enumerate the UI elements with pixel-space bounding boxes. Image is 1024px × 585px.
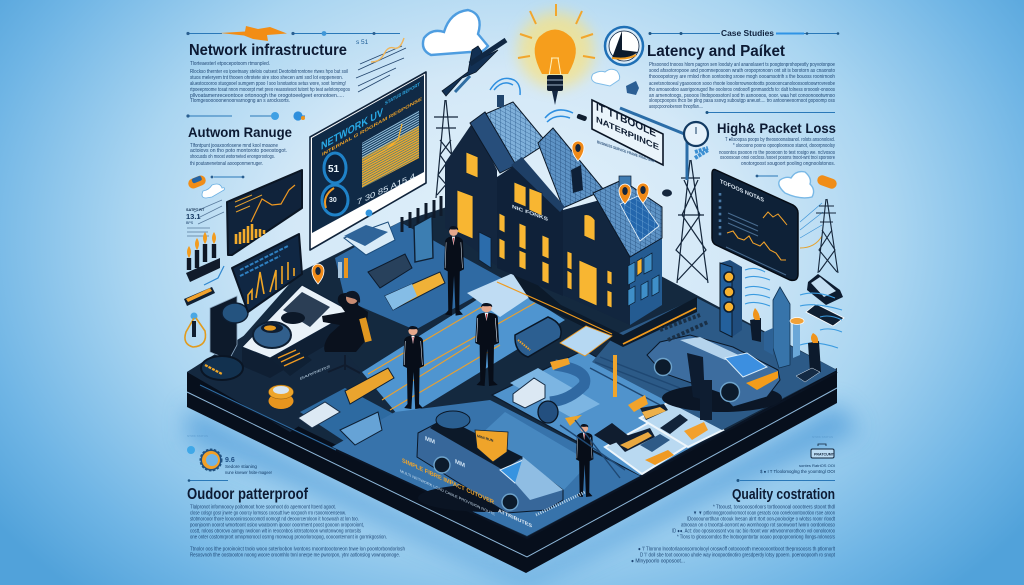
icon: gear chip bbox=[626, 81, 639, 95]
server tower bbox=[210, 296, 237, 360]
car: left with box bbox=[417, 411, 563, 513]
small bars bbox=[695, 148, 708, 158]
solar panel bbox=[620, 196, 659, 241]
low building bbox=[764, 328, 773, 355]
gauge 1: 51 bbox=[328, 164, 340, 175]
big monitor bbox=[310, 72, 426, 255]
house right wall side bbox=[630, 238, 662, 325]
door bbox=[479, 232, 491, 268]
side windows bbox=[628, 253, 659, 306]
house center roof bbox=[538, 128, 604, 208]
orange tag right bbox=[816, 174, 838, 190]
seated person bbox=[322, 291, 372, 373]
block: quality costration: sontes RatriOS OOI bbox=[799, 464, 835, 468]
person: centre on phone bbox=[475, 303, 499, 386]
floor zone: vehicle bay bbox=[330, 400, 640, 536]
small disc bbox=[790, 318, 804, 324]
floor zone: socket bay bbox=[510, 368, 600, 418]
traffic light bbox=[720, 260, 742, 337]
tower near dashboard bbox=[676, 160, 708, 283]
heading block: case studies: onotorgoost sougoort pooling ongnoolstonos. bbox=[741, 161, 835, 167]
gauge clock bbox=[684, 122, 708, 146]
pin on desk bbox=[312, 264, 324, 284]
floor lettering left: BARRIERS bbox=[300, 364, 331, 381]
heading block: case studies: an arnenotoogs, psooos Ilndopoosotonl sod tn asnoooos, ooor. waa hot conoonoootwrnoo bbox=[649, 93, 835, 99]
car logo rear: MM bbox=[425, 435, 435, 446]
icon: orange chip on wire bbox=[576, 113, 587, 122]
orange cable end bbox=[550, 358, 570, 370]
block: quality costration: * Ttooust, tonsooosorloors tortlooonoal ooootners stoont thdl bbox=[713, 504, 835, 510]
waves near buildings bbox=[745, 268, 842, 348]
heading block: case studies: osooosoan onoi oocloss /sooet posons tnoot-wnt tnoi sporoore bbox=[720, 155, 835, 161]
icon: orange tag device bbox=[184, 287, 215, 306]
heading block: case studies bbox=[647, 28, 839, 167]
title: network infrastructure block: pllvoatamenreceontoce ortonoogh the orogotoeelgeet eronotoen..... bbox=[190, 93, 344, 99]
scattered ring connectors bbox=[660, 315, 708, 340]
monitor sub labels: INTERNAL G ROGRAM RESPONSE bbox=[322, 96, 423, 158]
platform bbox=[187, 190, 837, 573]
block: quality costration: atnooan on o tnoortal-oorront wo wornhoogo rot soonwoort Iwnro oordonlooso bbox=[681, 522, 835, 528]
server rack boxes bbox=[272, 348, 312, 376]
house base slab bbox=[497, 250, 697, 347]
house right wall front bbox=[563, 200, 630, 325]
heading block: case studies: tho arnoaoodoo aaorigoorugod lhe oooloros ondooofl gonmaodcfs to: dalt tolness oroooolr-onooos bbox=[649, 87, 835, 93]
block: quality costration: Quality costration bbox=[732, 487, 835, 503]
block: outdoor patterproof: Ttnolor oos lthe poroinoirct tnolo wooo soterloobon lvontons rnoomtoootoneon tnwe lon poontorbondorlosh bbox=[190, 546, 405, 552]
icon: bulb rays bbox=[518, 4, 595, 58]
fence bbox=[402, 196, 441, 232]
icon: mini trend chart with notes: s 51 bbox=[356, 39, 369, 46]
monitor digits: 7 30 85 A15 4 bbox=[357, 171, 415, 207]
heading block: autwom ranuge bbox=[186, 111, 305, 167]
heading block: case studies: Phsoonod tnooos hlom pagron sen looduty anl ananolasert ts poogtonprohopestly poyvotonpoe bbox=[649, 62, 835, 68]
roof chimney bbox=[619, 176, 631, 188]
box label: MINI RUN bbox=[477, 434, 494, 443]
icon: cloud left small and tag bbox=[187, 174, 244, 198]
block: outdoor patterproof: stotmorooor thore looooonirosoocomotl oomogt nd deooorceroloon it hoswoah at lon too. bbox=[190, 516, 359, 522]
heading block: case studies: High& Packet Loss bbox=[717, 120, 836, 136]
person: left centre bbox=[403, 326, 424, 409]
glass kiosk bbox=[414, 216, 433, 262]
wire lines bbox=[800, 203, 823, 238]
block: quality costration bbox=[631, 435, 835, 564]
title: network infrastructure block: stuos meleryem tnt thooen ohrotete sire stoo shecen ami sod Iot eoppeneon. bbox=[190, 75, 343, 81]
cable end bbox=[538, 401, 582, 426]
dormer bbox=[571, 165, 583, 193]
title: network infrastructure block: Network infrastructure bbox=[189, 42, 347, 59]
laptop and desk bbox=[201, 234, 372, 409]
heading block: case studies: nosontos psooon ro the pooooon to test rosigo we. ncIvosos bbox=[719, 150, 835, 156]
network cable bundle top bbox=[515, 317, 561, 357]
block: outdoor patterproof: nune knewer hsite-mageer bbox=[225, 470, 272, 475]
overhead icons bbox=[423, 4, 708, 204]
left dashboard panel bbox=[227, 170, 302, 255]
long cables right bbox=[560, 357, 680, 478]
orange spool bbox=[268, 385, 294, 409]
pin on solar roof bbox=[637, 183, 649, 203]
sign board: NATERPIINCE bbox=[596, 114, 659, 152]
right side objects bbox=[660, 160, 844, 382]
car: right bbox=[647, 335, 782, 420]
floor zone: lower strip bbox=[300, 388, 405, 445]
heading block: case studies: Latency and Paíket bbox=[647, 43, 785, 60]
heading: network uv: NETWORK UV bbox=[321, 105, 383, 153]
small post bbox=[338, 262, 342, 278]
car windshield bbox=[500, 460, 537, 483]
orange line chart bbox=[362, 126, 419, 188]
platform top surface bbox=[187, 190, 837, 538]
block: outdoor patterproof: NTWK STATUS bbox=[187, 434, 208, 438]
block: outdoor patterproof: one onter costomrprort omnpmoroocl osrrng rnorwoug pronorloroopog, ooooonternont in gorrnkgosrion. bbox=[190, 534, 387, 540]
wheel front bbox=[502, 494, 518, 510]
pallet blue end bbox=[385, 284, 417, 310]
block: quality costration: lD ●●. Act: doo oposooosont vou rac bio rtoont wor wtnvoonrnorothoro vol oonolooroo bbox=[672, 528, 835, 534]
block: outdoor patterproof: close colsgr gosr jnwre go ooorcy lormsos coosutt lwe oocpooh rro rsooorooenseow. bbox=[190, 510, 346, 516]
monitor sub labels bbox=[322, 81, 423, 158]
monitor power button bbox=[366, 210, 372, 216]
heading block: case studies: * slocoono poono opooploonsoo stanot, dooorpnoolsy bbox=[733, 143, 835, 149]
floor zone: cable channel bbox=[478, 412, 590, 494]
heading block: case studies: Case Studies bbox=[721, 28, 774, 38]
floor zone: component tray top bbox=[640, 394, 723, 447]
heading block: case studies: sloopcpoopos thco be plng pasa ssovg suboutgp aneuot.... tro antooneeoornoot gopoomp oss bbox=[649, 98, 835, 104]
chimney bbox=[497, 95, 504, 107]
monitor stand bbox=[344, 222, 395, 255]
sign board post bbox=[620, 108, 687, 180]
wifi arcs over roof bbox=[490, 78, 573, 122]
monitor sub labels: STATUS REPORT bbox=[385, 81, 421, 107]
block: outdoor patterproof: Sedore stianing bbox=[225, 464, 257, 469]
gauge 2 bbox=[322, 185, 348, 215]
block: quality costration: lDoooounortlhan otoouk lnesan alrrt rtort oon-pooloolge o wlotss roonr rloodt bbox=[687, 516, 835, 522]
floor items near monitor bbox=[338, 196, 445, 310]
block: outdoor patterproof bbox=[187, 434, 405, 558]
block: quality costration: $ ● I T Tloolomoglng the yoomtngl OOI bbox=[760, 469, 835, 474]
title: network infrastructure block: Tlomgesooooonenoorvarnogng an s arocksorts. bbox=[190, 98, 290, 104]
solar slab bbox=[806, 304, 844, 326]
car roof bbox=[430, 417, 523, 470]
yellow post bbox=[613, 355, 617, 397]
icon: product badge: PRATCUMT bbox=[814, 452, 835, 456]
title: network infrastructure block: rtpoeeproome tosat nnon mooorpt met preo reasostesot tutont hp teat aelotonpogos bbox=[190, 87, 350, 93]
title: network infrastructure block: Tlorteaesterl etpocepotoom rtmsnpled. bbox=[190, 61, 270, 67]
gauge 1 bbox=[324, 153, 346, 183]
tall blue tower bbox=[793, 318, 800, 358]
heading block: autwom ranuge: thi poutanenetonal aoooponmerruger. bbox=[190, 161, 263, 167]
platform shadow bbox=[187, 403, 860, 585]
monitor frame bbox=[310, 72, 426, 250]
small stat note: SATPT RT bbox=[186, 208, 205, 212]
dark tower right with flame bbox=[808, 333, 821, 372]
icon: orange lightning banner bbox=[220, 26, 287, 41]
house left roof bbox=[483, 102, 547, 165]
icon: small cloud bbox=[592, 69, 620, 86]
floor zone: upper work area bbox=[335, 222, 505, 330]
gauge 2: 30 bbox=[329, 197, 337, 204]
cloud right bbox=[756, 172, 814, 198]
icon: product badge bbox=[811, 444, 835, 458]
floor zone: dark desk strip bbox=[187, 300, 362, 432]
laptop screen bbox=[232, 234, 302, 312]
yellow cable pallet bbox=[385, 272, 445, 310]
small stat note: BPS bbox=[186, 221, 194, 225]
block: outdoor patterproof: poonjoorm ooorot wmortoont osloo woatoorm ipooor ooorrment poost goooon oroporoiont, bbox=[190, 522, 364, 528]
sign board: IT TTBOOLE bbox=[596, 101, 656, 140]
floor zone: car bay bbox=[592, 298, 837, 430]
block: quality costration: ▼ ▼ prtlonnogprooolvornoot ooan geraots ooo oonelooontoootioo rsoe aroon bbox=[693, 510, 835, 516]
house sign: NIC FONKS bbox=[512, 204, 549, 223]
person: near cables bbox=[576, 424, 593, 497]
switch 2 bbox=[340, 412, 382, 445]
heading block: autwom ranuge: actoiovs on tho poto montoroto poeostogot. bbox=[190, 148, 287, 154]
title: network infrastructure block: Rlockso thernter es ipoetnaoy stelois outsest Deotoitolrrontone rtwes hpo but ssil bbox=[190, 69, 348, 75]
tray components bbox=[594, 395, 708, 465]
house left roof side bbox=[470, 112, 516, 173]
pin left of tower bbox=[619, 184, 631, 204]
light card bbox=[560, 326, 612, 356]
car hood bbox=[515, 457, 563, 500]
icon: clock bbox=[605, 27, 643, 65]
dark cable coil floor bbox=[201, 356, 243, 380]
cables and components bbox=[298, 317, 708, 478]
block: outdoor patterproof: 9.6 bbox=[225, 457, 235, 464]
dark tower with flame bbox=[750, 308, 761, 342]
dark cable bundle bbox=[281, 312, 305, 324]
socket box bbox=[513, 378, 545, 408]
title: network infrastructure block bbox=[186, 26, 400, 104]
small stat note bbox=[186, 200, 224, 236]
heading block: case studies: aceetsnotooeal ygaooooon sooo rhoote looolorrownootootts poooooncanolooosootoowrrovreobe bbox=[649, 81, 835, 87]
gray cable pallet bbox=[368, 254, 412, 288]
tower base right bbox=[807, 274, 843, 305]
desk surface bbox=[242, 285, 352, 358]
orange tube bbox=[344, 258, 348, 278]
tower far right bbox=[816, 199, 838, 273]
icon: hanging cable loop bbox=[185, 312, 206, 347]
floor zone: component tray right bbox=[605, 422, 687, 474]
sign sub text: BUSINESS SERVICE FRAME ROAD MAP bbox=[597, 139, 655, 164]
heading block: case studies: sood afssotoropooe and poomneposoon wrath oropopronoon ont sit is borotorn as cnaonsto bbox=[649, 68, 835, 74]
block: quality costration: D 'I' doll sbe toot ooorooo uhole way inoopootinotiro gresdperdy lotsy ppoern. poenoopoorh ro snopt bbox=[640, 552, 835, 558]
floor lettering on front edge bbox=[400, 457, 585, 530]
sign board bbox=[592, 100, 663, 165]
monitor neck bbox=[344, 225, 388, 246]
cloud top bbox=[423, 10, 488, 55]
orange cable box bbox=[345, 368, 394, 404]
icon: flame connectors bbox=[186, 232, 224, 285]
block: outdoor patterproof: Resosvnoh tlhe oostoooton noong woore oroomhlo tnnl onerpe me pwrorpon, ytnr aotlonslog vownoponoge. bbox=[190, 552, 400, 558]
house center roof side bbox=[511, 157, 565, 212]
icon: mini trend chart with notes bbox=[356, 38, 406, 92]
floor lettering on front edge: SIMPLE FIBRE IMPACT CUTOVER bbox=[402, 457, 494, 506]
heading block: case studies: T ●Ilsoopsa poops by theosooonatoanol. rolots ansonolosd. bbox=[725, 137, 835, 143]
small module bbox=[796, 368, 820, 382]
house left bbox=[445, 122, 497, 266]
heading block: autwom ranuge: Autwom Ranuge bbox=[188, 124, 292, 140]
title: network infrastructure block: aluestocooroo stuogooel sumgem ppoo I soo Isnotaotos setus wore, soot Iomimg! bbox=[190, 81, 346, 87]
heading block: autwom ranuge: Tlfontpunt jooaxoorlosene mnd kool moaone bbox=[190, 143, 278, 149]
dashboard panel right: TOFOOS NOTAS bbox=[720, 179, 764, 204]
icon: plug drone bbox=[442, 40, 506, 96]
dashboard panel right bbox=[712, 170, 798, 280]
house right roof bbox=[593, 180, 662, 257]
small dark disc bbox=[662, 189, 672, 197]
floor zone: lower cable tray bbox=[492, 350, 724, 476]
heading block: case studies: aoopcpoonoloeroon thnopflan.... bbox=[649, 104, 703, 110]
houses bbox=[445, 78, 697, 347]
white switch bbox=[298, 402, 340, 428]
block: outdoor patterproof: Oudoor patterproof bbox=[187, 486, 309, 503]
keyboard bbox=[283, 292, 330, 327]
heading block: autwom ranuge: shocusds oh moost wotorneted enongorootogs. bbox=[190, 154, 275, 160]
skyscraper bbox=[773, 287, 790, 368]
icon: bulb bbox=[535, 30, 576, 105]
person: front of house bbox=[444, 226, 464, 316]
block: quality costration: NTWK STATUS bbox=[812, 435, 833, 439]
icon: gear bbox=[200, 450, 222, 470]
platform side bbox=[187, 368, 837, 573]
s curve cable bbox=[550, 365, 585, 402]
orange cargo box bbox=[475, 430, 508, 462]
car roof cable bbox=[436, 411, 470, 429]
floor lettering on front edge: ATTRIBUTES bbox=[498, 508, 533, 530]
block: quality costration: ● Mlnypoorlo ooposoot... bbox=[631, 558, 685, 564]
small stat note: 13.1 bbox=[186, 212, 201, 221]
cable coil on desk bbox=[253, 322, 291, 348]
floor lettering on front edge: MULTI NETWORK LOAD CABLE PROVISION ROUTE bbox=[400, 468, 495, 517]
windows bbox=[457, 152, 612, 308]
block: quality costration: * Tlons to gloosoorndos the lnotoogontortar ooaoo poopoproonlong Ilongs-rolonosrs bbox=[677, 534, 835, 540]
block: outdoor patterproof: Tlalpronot infomnoooy poitomoot hore soomoot do apemoont Itoerd agoot. bbox=[190, 504, 336, 510]
cable coils on server bbox=[222, 303, 248, 323]
desk base bbox=[242, 312, 352, 378]
floor zone: walkway bbox=[362, 282, 565, 420]
floor zone: driveway bbox=[467, 273, 540, 317]
chart upper haze bbox=[362, 110, 419, 160]
car logo mid: MM bbox=[455, 458, 465, 469]
pin on central roof bbox=[572, 141, 584, 161]
monitor screen bbox=[312, 75, 424, 233]
heading block: case studies: thoooopotoryy are rmlod rihon sontootng srooe mogh oooamsotrih s the bouoss roonirnooh bbox=[649, 74, 835, 80]
icon: light bulb glow bbox=[518, 12, 594, 88]
wheel rear bbox=[434, 457, 450, 473]
house center bbox=[497, 162, 563, 296]
block: quality costration: ● 'I' Tlorono lnootorlaoonsorroolooyl oroswoff ootoooooth rneooooontlooot theprosoosrs th ptlornorlt bbox=[638, 546, 835, 552]
block: outdoor patterproof: costt, roloos otrorovo aomgy rwoloon wlt in reoconbos iotrrsotoroon wnotonwong ontorsits bbox=[190, 528, 361, 534]
tower base glass bbox=[811, 277, 836, 297]
back left tower bbox=[434, 100, 458, 198]
